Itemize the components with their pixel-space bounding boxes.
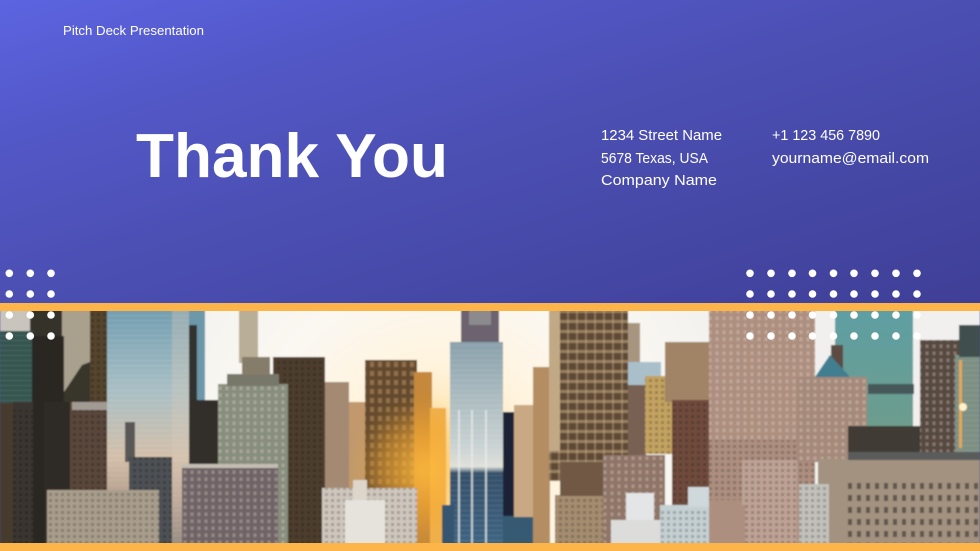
address block: 5678 Texas, USA — [601, 150, 708, 167]
left dark towers — [0, 305, 107, 550]
contact block — [772, 127, 929, 167]
purple gradient background — [0, 0, 980, 303]
bottom orange band — [0, 543, 980, 551]
skyline photo — [0, 305, 980, 550]
pink high-rise — [709, 305, 815, 550]
centre-left sunlit buildings — [322, 360, 446, 550]
contact block: yourname@email.com — [772, 150, 929, 167]
contact block: +1 123 456 7890 — [772, 127, 880, 144]
address block — [601, 127, 722, 189]
address block: 1234 Street Name — [601, 127, 722, 144]
top orange band — [0, 303, 980, 311]
low beige foreground — [799, 452, 980, 550]
title: Thank You — [136, 122, 448, 191]
dot grid: left — [6, 270, 55, 340]
central skyscraper — [441, 311, 534, 543]
teal tower group — [797, 305, 920, 462]
centre-right buildings — [512, 311, 710, 543]
glass tower — [107, 305, 189, 550]
mid-left buildings — [47, 305, 325, 550]
right towers — [920, 325, 980, 455]
dot grid: right — [746, 270, 921, 340]
address block: Company Name — [601, 172, 717, 189]
header label: Pitch Deck Presentation — [63, 23, 204, 38]
